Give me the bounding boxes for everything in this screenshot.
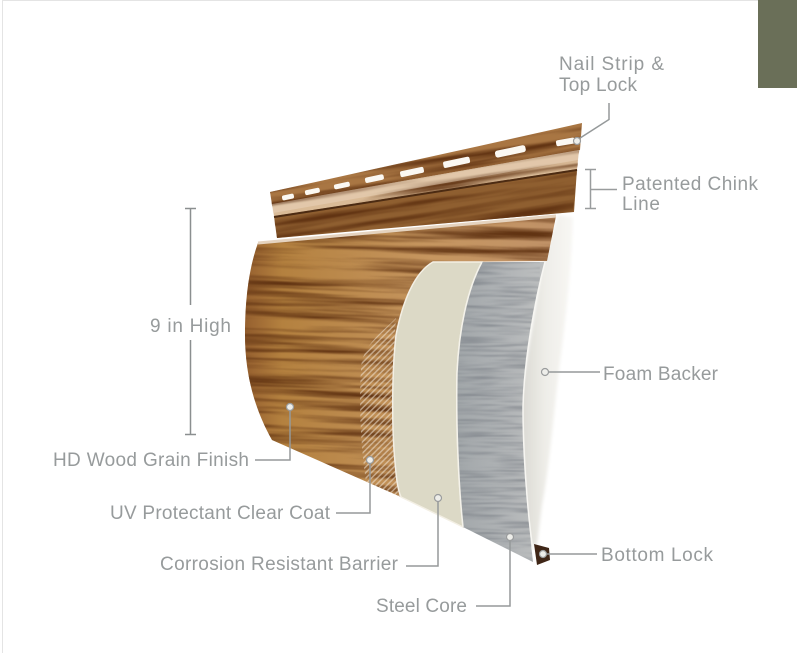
corrosion resistant barrier layer	[393, 262, 482, 527]
foam backer layer	[520, 215, 573, 545]
label: nail strip and top lock: Nail Strip &	[559, 54, 664, 75]
leader markers	[286, 138, 580, 558]
light lock band	[272, 150, 579, 216]
corner colour tab	[758, 0, 797, 88]
top nail strip and chink line	[270, 123, 582, 238]
nail strip	[270, 123, 582, 204]
label: 9 in high: 9 in High	[150, 316, 231, 337]
nail slots	[282, 137, 575, 201]
chink line band	[274, 169, 577, 238]
label: patented chink line: Line	[622, 194, 660, 215]
leader lines	[255, 103, 609, 606]
label: HD wood grain finish: HD Wood Grain Finish	[53, 450, 249, 471]
wood top edge highlight	[258, 216, 556, 243]
label: UV protectant clear coat: UV Protectant Clear Coat	[110, 503, 331, 524]
lock highlight	[272, 150, 579, 213]
label: foam backer: Foam Backer	[603, 364, 719, 385]
label: corrosion resistant barrier: Corrosion Resistant Barrier	[160, 554, 399, 575]
label: nail strip and top lock: Top Lock	[559, 75, 638, 96]
wood grain finish layer	[245, 214, 556, 497]
siding cross-section illustration	[245, 123, 582, 565]
chink line bracket	[585, 169, 617, 209]
steel core layer	[450, 258, 545, 564]
UV clear coat hatch area	[360, 318, 401, 497]
label: patented chink line: Patented Chink	[622, 174, 758, 195]
label: bottom lock: Bottom Lock	[601, 545, 714, 566]
height dimension bracket	[185, 208, 196, 434]
chink shadow line	[274, 170, 577, 217]
label: steel core: Steel Core	[376, 596, 467, 617]
bottom lock	[534, 544, 550, 565]
